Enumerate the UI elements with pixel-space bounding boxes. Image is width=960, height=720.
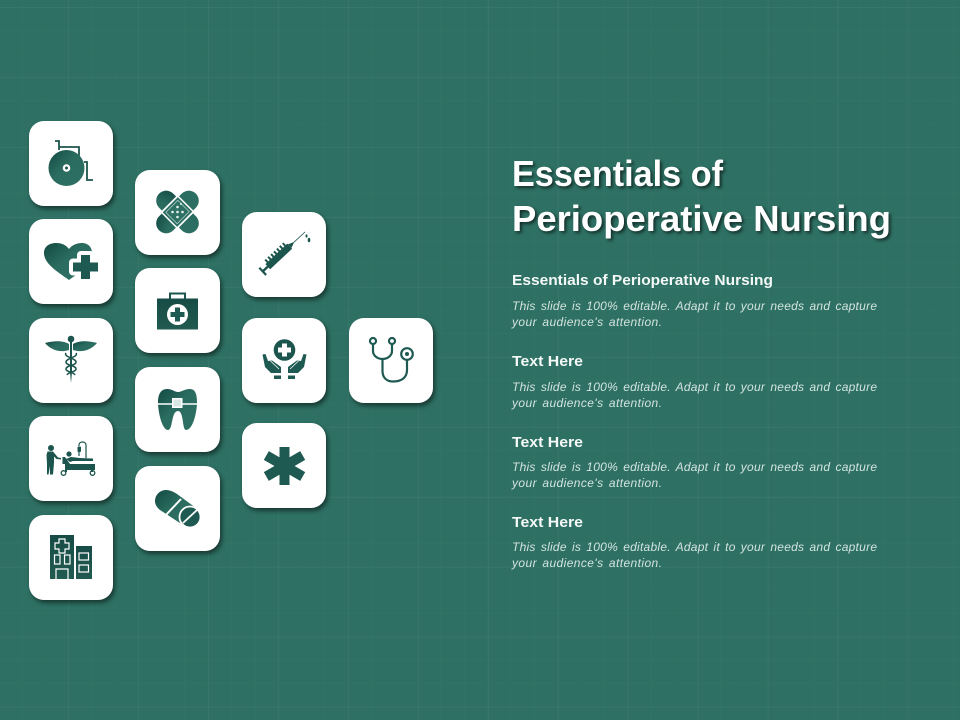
title (512, 153, 891, 239)
text block: section 4 (511, 514, 877, 570)
text block: section 4: your audience's attention. (511, 556, 662, 570)
text block: essentials: Essentials of Perioperative Nursing (512, 272, 773, 289)
text block: section 3 (511, 434, 877, 490)
text block: section 3: This slide is 100% editable. Adapt it to your needs and capture (512, 460, 877, 474)
title: Essentials of (512, 153, 724, 194)
card: syringe icon (242, 212, 326, 297)
text block: section 3: Text Here (512, 434, 583, 451)
text block: section 4: Text Here (512, 514, 583, 531)
text block: section 2: Text Here (512, 353, 583, 370)
card: hospital building icon (29, 515, 113, 600)
card: tooth with braces icon (135, 367, 220, 452)
card: first aid kit icon (135, 268, 220, 353)
text block: essentials (511, 272, 877, 329)
card: heart with plus icon (29, 219, 113, 304)
card: asterisk icon (242, 423, 326, 508)
card: caduceus icon (29, 318, 113, 403)
card: stethoscope icon (349, 318, 433, 403)
title: Perioperative Nursing (512, 198, 891, 239)
text block: essentials: This slide is 100% editable. Adapt it to your needs and capture (512, 299, 877, 313)
card: pill capsule icon (135, 466, 220, 551)
text block: section 4: This slide is 100% editable. Adapt it to your needs and capture (512, 540, 877, 554)
text block: section 2: your audience's attention. (511, 396, 662, 410)
text block: section 2 (511, 353, 877, 410)
text block: section 3: your audience's attention. (511, 476, 662, 490)
text block: section 2: This slide is 100% editable. Adapt it to your needs and capture (512, 380, 877, 394)
card: wheelchair icon (29, 121, 113, 206)
card: hands holding medical cross icon (242, 318, 326, 403)
card: patient on hospital bed icon (29, 416, 113, 501)
text block: essentials: your audience's attention. (511, 315, 662, 329)
card: bandage icon (135, 170, 220, 255)
